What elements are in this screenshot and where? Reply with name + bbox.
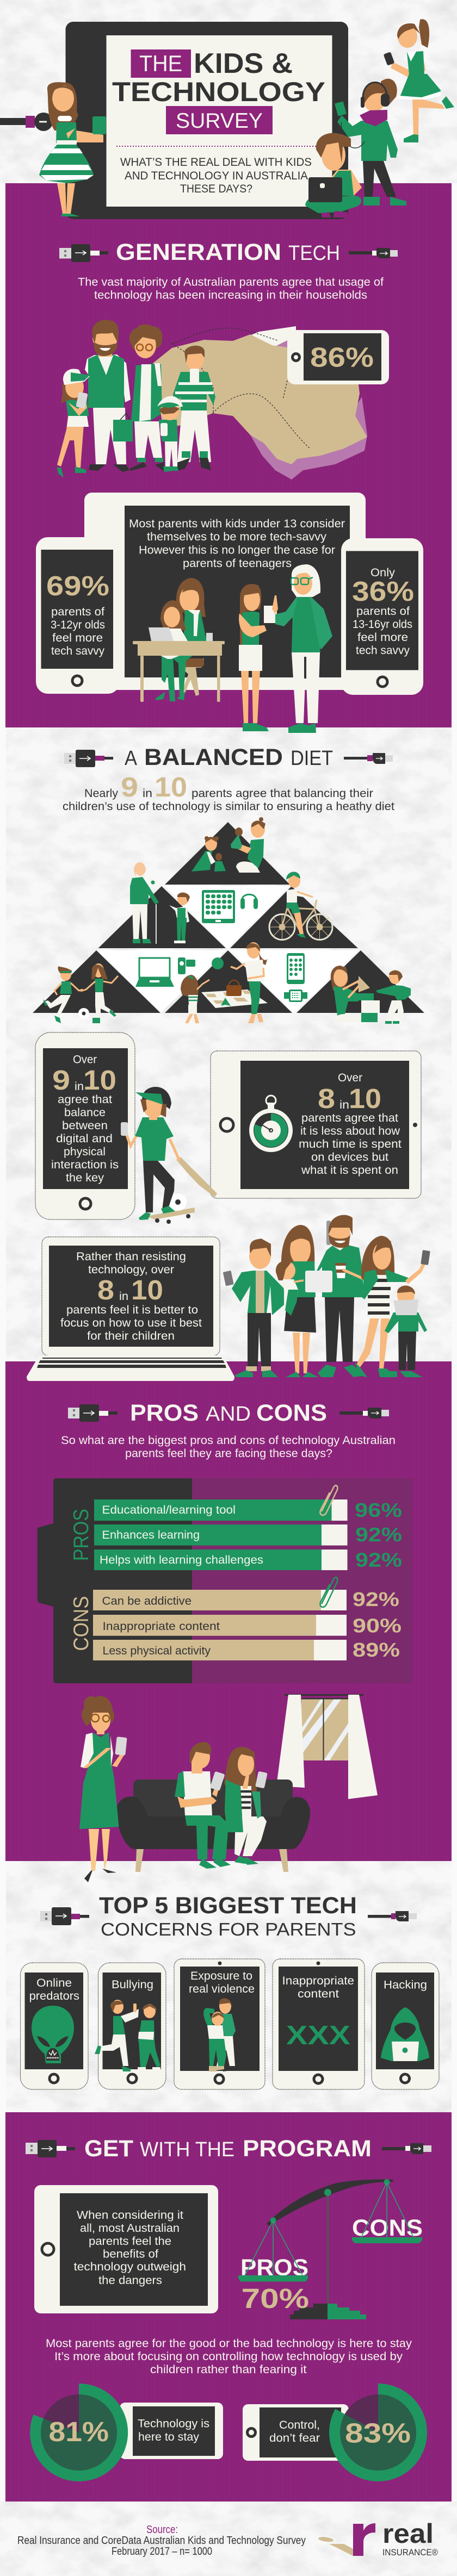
phone: over 9 in 10: agree that [58,1093,112,1106]
tablet: when considering it all: all, most Australian [80,2222,180,2235]
figure: girl with cap [57,369,90,477]
tablet: over 8 in 10: 8 [318,1083,335,1114]
pros pan: PROS [240,2255,308,2281]
heading: generation tech: GENERATION [116,239,281,265]
heading: a balanced diet: A [125,747,138,770]
text: technology is here to stay: children rather than fearing it [150,2363,307,2376]
figure: boy on sofa with phone [175,1742,231,1869]
phone: control, don't fear [243,2404,349,2461]
text: technology is here to stay: Most parents agree for the good or the bad technology is here to stay [46,2337,412,2350]
figure: small boy with cap [157,396,183,472]
bar: enhances learning 92%: 92% [355,1523,402,1546]
laptop keyboard base [27,1355,234,1381]
panel: a balanced diet [27,744,430,1381]
chart: 81% donut [30,2384,128,2481]
figures: family picnic [181,942,268,1023]
tablet: over 8 in 10: on devices but [311,1151,388,1163]
chart: 83% donut [329,2384,427,2481]
heading: pros and cons [68,1400,389,1426]
intro text: So what are the biggest pros and cons of technology Australian [61,1434,396,1447]
phone: 36 percent [341,538,423,695]
footer [17,2518,438,2558]
panel: pros and cons [37,1400,412,1882]
window with curtains [276,1694,378,1799]
figures: family of five with phones [57,320,215,477]
bar: less physical activity 89%: Less physical activity [102,1645,211,1657]
text: technology is here to stay: It’s more about focusing on controlling how technology is used by [54,2350,403,2363]
figure: teen girl [239,584,277,731]
phone: hacking [372,1963,439,2089]
intro text: nearly 9 in 10: 10 [155,771,187,802]
pros label: PROS [70,1509,93,1561]
intro text: nearly 9 in 10: Nearly [84,787,119,800]
big tablet: However this is no longer the case for [139,544,335,557]
icon: tablet [202,890,235,923]
heading: generation tech [59,239,398,265]
figure: mum with shopping bag [113,324,164,471]
chart: balance scale, pros 70% [238,2179,423,2319]
phone: control, don't fear: Control, [279,2419,320,2431]
figures: teen girl and grandmother [239,564,332,733]
source text: Source: [146,2524,178,2536]
bar: enhances learning 92%: Enhances learning [102,1529,200,1541]
phone: 86 percent: 86% [310,341,374,373]
figure: boy on bicycle [269,872,332,939]
phone: bullying: Bullying [112,1978,153,1991]
laptop: rather than resisting [27,1237,234,1381]
big tablet: parents of teenagers [183,557,292,570]
figure: woman in striped dress [39,82,106,216]
figure: bully pushing [95,2000,139,2071]
phone: 36 percent: feel more [357,631,408,644]
figure: girl on sofa with phone [224,1747,268,1865]
text: technology is here to stay [46,2337,412,2376]
heading: get with the program: GET [84,2136,133,2162]
chart: balance scale, pros 70%: 70% [242,2283,309,2314]
figure: dad with coffee, tablet and phone [305,1215,365,1377]
title: THE [139,51,182,76]
figures: mother and daughters on floor [192,817,265,873]
tablet: when considering it all [34,2185,218,2313]
logo: real insurance: INSURANCE® [382,2547,438,2558]
intro text: nearly 9 in 10: children’s use of technology is similar to ensuring a heathy diet [63,800,394,813]
icon: tan paperclip [320,1485,337,1515]
bar: can be addictive 92%: Can be addictive [102,1595,192,1608]
scene: family on sofa [79,1694,378,1882]
chart: pros and cons bars on folder [37,1478,412,1683]
logo: real insurance [318,2518,438,2558]
figures: family of five with devices [223,1215,430,1377]
title [112,48,325,134]
big tablet [84,493,366,690]
icon: smartwatch [284,990,307,1002]
tablet: over 8 in 10: Over [338,1072,362,1084]
source text [17,2524,306,2558]
heading: top 5 biggest tech concerns [40,1893,417,1939]
tablet: over 8 in 10: in [339,1099,349,1111]
panel: tech savvy comparison [36,493,423,733]
heading: top 5 biggest tech concerns: CONCERNS FOR PARENTS [101,1919,356,1939]
bar: helps with learning challenges 92%: 92% [355,1548,402,1571]
icon: green paperclip [320,1577,337,1607]
tablet: when considering it all: the dangers [98,2274,162,2287]
chart: activity pyramid [33,817,424,1024]
intro text: technology has been increasing in their households [94,289,367,301]
icon: hooded hacker [381,2007,429,2061]
figures: children running with soccer ball [44,963,118,1023]
figure: two boys fighting [203,1998,240,2071]
phone: 69 percent [36,537,120,694]
phone: 69 percent: tech savvy [51,645,104,657]
phone: bullying [95,1963,166,2089]
intro text: parents feel they are facing these days? [125,1447,332,1460]
figure: woman with glasses and phone [79,1696,127,1882]
cons pan: CONS [352,2215,423,2241]
bar: can be addictive 92% [93,1588,399,1610]
icon: left cable plugged into tablet [0,111,96,131]
tablet: when considering it all: technology outweigh [74,2261,186,2273]
cons pan [352,2182,423,2243]
intro text: nearly 9 in 10: parents agree that balancing their [192,787,373,800]
phone: 36 percent: parents of [356,605,410,618]
intro text: The vast majority of Australian parents agree that usage of [78,276,384,288]
phone: over 9 in 10: the key [66,1172,104,1184]
tablet frame [65,22,348,219]
icon: green ball [212,957,224,969]
phone: over 9 in 10: 10 [83,1065,116,1096]
laptop: rather than resisting: for their children [87,1330,175,1342]
laptop: rather than resisting: Rather than resisting [76,1250,186,1263]
chart: 83% donut: 83% [345,2417,411,2449]
intro text: nearly 9 in 10: in [143,787,152,800]
figure: boy with cap, skateboard and bat [121,1087,217,1224]
chart: 81% donut: 81% [49,2416,109,2447]
icon: video camera [178,957,195,974]
figure: girl with ponytail and phone [384,19,454,142]
laptop: rather than resisting: parents feel it is better to [66,1304,198,1316]
phone: over 9 in 10: in [75,1080,84,1093]
panel: get with the program [26,2136,431,2481]
phone: over 9 in 10: 9 [52,1065,70,1096]
title: TECHNOLOGY [112,77,325,107]
phone: online predators [21,1963,88,2089]
laptop: rather than resisting: technology, over [88,1264,174,1276]
phone: technology is here to stay: here to stay [138,2431,200,2443]
intro text [61,1434,396,1460]
title: SURVEY [176,109,263,133]
phone: over 9 in 10 [35,1032,135,1219]
heading: pros and cons: CONS [256,1400,327,1426]
bar: inappropriate content 90% [93,1615,402,1637]
bar: less physical activity 89%: 89% [353,1639,400,1661]
bar: educational/learning tool 96% [94,1499,402,1521]
bar: helps with learning challenges 92%: Helps with learning challenges [100,1554,263,1566]
laptop: rather than resisting: 10 [131,1274,163,1305]
tablet: when considering it all: benefits of [103,2248,158,2261]
phone: over 9 in 10: between [62,1119,108,1132]
figure: teen boy in stripes [173,346,215,471]
icon: smartphone [287,953,305,984]
intro text: nearly 9 in 10 [63,771,394,813]
heading: get with the program: PROGRAM [243,2136,372,2162]
phone: 69 percent: 69% [46,570,109,601]
tablet: over 8 in 10: 10 [349,1083,381,1114]
pyramid triangles [33,822,424,1013]
source text: February 2017 – n= 1000 [112,2546,212,2558]
bar: inappropriate content 90%: 90% [353,1615,402,1637]
phone: 86 percent [287,330,389,384]
phone: inappropriate content: content [298,1988,339,2000]
source text: Real Insurance and CoreData Australian Kids and Technology Survey [17,2535,306,2547]
phone: 36 percent: 13-16yr olds [353,618,412,631]
panel: header tablet and title [0,19,454,219]
phone: 36 percent: 36% [352,576,414,607]
laptop: rather than resisting: focus on how to use it best [60,1317,202,1329]
sofa [116,1779,310,1872]
figures: mother and daughter at desk [133,578,225,702]
phone: over 9 in 10: digital and [56,1133,113,1145]
figure: boy sitting with laptop [305,133,362,217]
heading: generation tech: TECH [288,242,340,265]
panel: top 5 concerns [21,1893,439,2089]
icon: stopwatch [249,1096,293,1152]
phone: online predators: Online [36,1977,72,1989]
phone: over 9 in 10: Over [73,1054,97,1066]
tablet: over 8 in 10: much time is spent [299,1138,402,1150]
heading: get with the program: WITH THE [140,2138,234,2161]
bar: can be addictive 92%: 92% [353,1588,399,1610]
tablet screen [107,35,332,207]
figure: mum with toddler and tablet [276,1225,318,1377]
bar: educational/learning tool 96%: Educational/learning tool [102,1504,236,1516]
panel: generation tech [36,239,423,733]
laptop: rather than resisting: in [119,1290,128,1303]
intro text [78,276,384,301]
phone: 69 percent: 3-12yr olds [51,619,105,631]
tablet: over 8 in 10: what it is spent on [301,1164,398,1177]
bar: enhances learning 92% [94,1523,402,1546]
phone: inappropriate content [273,1959,365,2089]
phone: 36 percent: tech savvy [356,644,410,657]
phone: over 9 in 10: physical [64,1146,106,1158]
figures: grandfather and boy [130,862,190,944]
big tablet: themselves to be more tech-savvy [147,531,327,543]
figure: victim [138,2004,160,2070]
phone: online predators: predators [29,1990,79,2002]
phone: 69 percent: parents of [51,606,104,618]
icon: xxx: XXX [286,2021,350,2050]
figure: girl in striped dress [355,1236,430,1377]
tablet: over 8 in 10: it is less about how [300,1125,400,1137]
bar: helps with learning challenges 92% [94,1548,402,1571]
tablet: when considering it all: parents feel the [89,2235,171,2248]
icon: headphones [240,894,258,909]
phone: 69 percent: feel more [52,632,103,644]
tablet: over 8 in 10 [211,1051,421,1198]
logo: real insurance: real [382,2518,434,2549]
heading: get with the program [26,2136,431,2162]
phone: inappropriate content: Inappropriate [282,1975,354,1987]
phone: 36 percent: Only [370,567,396,579]
heading: a balanced diet [64,744,393,770]
icon: laptop [135,958,174,987]
figure: teen boy with phone [223,1239,284,1377]
heading: a balanced diet: BALANCED [144,744,283,770]
phone: technology is here to stay: Technology is [138,2417,209,2430]
heading: pros and cons: AND [206,1403,251,1426]
tablet: when considering it all: When considering it [77,2209,183,2222]
pros pan [238,2220,308,2281]
phone: exposure to real violence: Exposure to [190,1970,252,1982]
figure: grandmother with glasses [272,564,332,733]
phone: over 9 in 10: interaction is [51,1159,119,1171]
tablet: over 8 in 10: parents agree that [301,1112,398,1124]
phone: over 9 in 10: balance [64,1106,106,1119]
figure: dad [85,320,131,472]
heading: top 5 biggest tech concerns: TOP 5 BIGGEST TECH [99,1893,357,1919]
intro text: nearly 9 in 10: 9 [121,771,138,802]
big tablet: Most parents with kids under 13 consider [129,518,345,530]
heading: a balanced diet: DIET [291,747,333,770]
laptop: rather than resisting: 8 [97,1274,114,1305]
bar: less physical activity 89% [93,1639,400,1661]
subtitle: AND TECHNOLOGY IN AUSTRALIA [125,170,308,182]
subtitle: THESE DAYS? [180,183,252,195]
title: KIDS & [194,48,293,79]
phone: exposure to real violence [174,1959,265,2089]
heading: pros and cons: PROS [130,1400,199,1426]
figure: girl with headphones [335,79,406,206]
phone: control, don't fear: don’t fear [269,2432,320,2444]
phone: exposure to real violence: real violence [189,1983,255,1995]
subtitle: WHAT’S THE REAL DEAL WITH KIDS [120,156,312,169]
bar: educational/learning tool 96%: 96% [355,1499,402,1521]
stat: 83% control, don't fear [243,2384,427,2481]
stat: 81% technology is here to stay [30,2384,223,2481]
bar: inappropriate content 90%: Inappropriate content [102,1620,220,1633]
phone: technology is here to stay [120,2403,223,2459]
figures: mother and son building blocks [331,966,411,1024]
figure: young boy with tablet [380,1285,427,1377]
map of australia [153,326,367,480]
subtitle [120,156,312,195]
phone: hacking: Hacking [384,1979,427,1991]
cons label: CONS [70,1596,93,1651]
icon: alien skull [32,2006,74,2063]
